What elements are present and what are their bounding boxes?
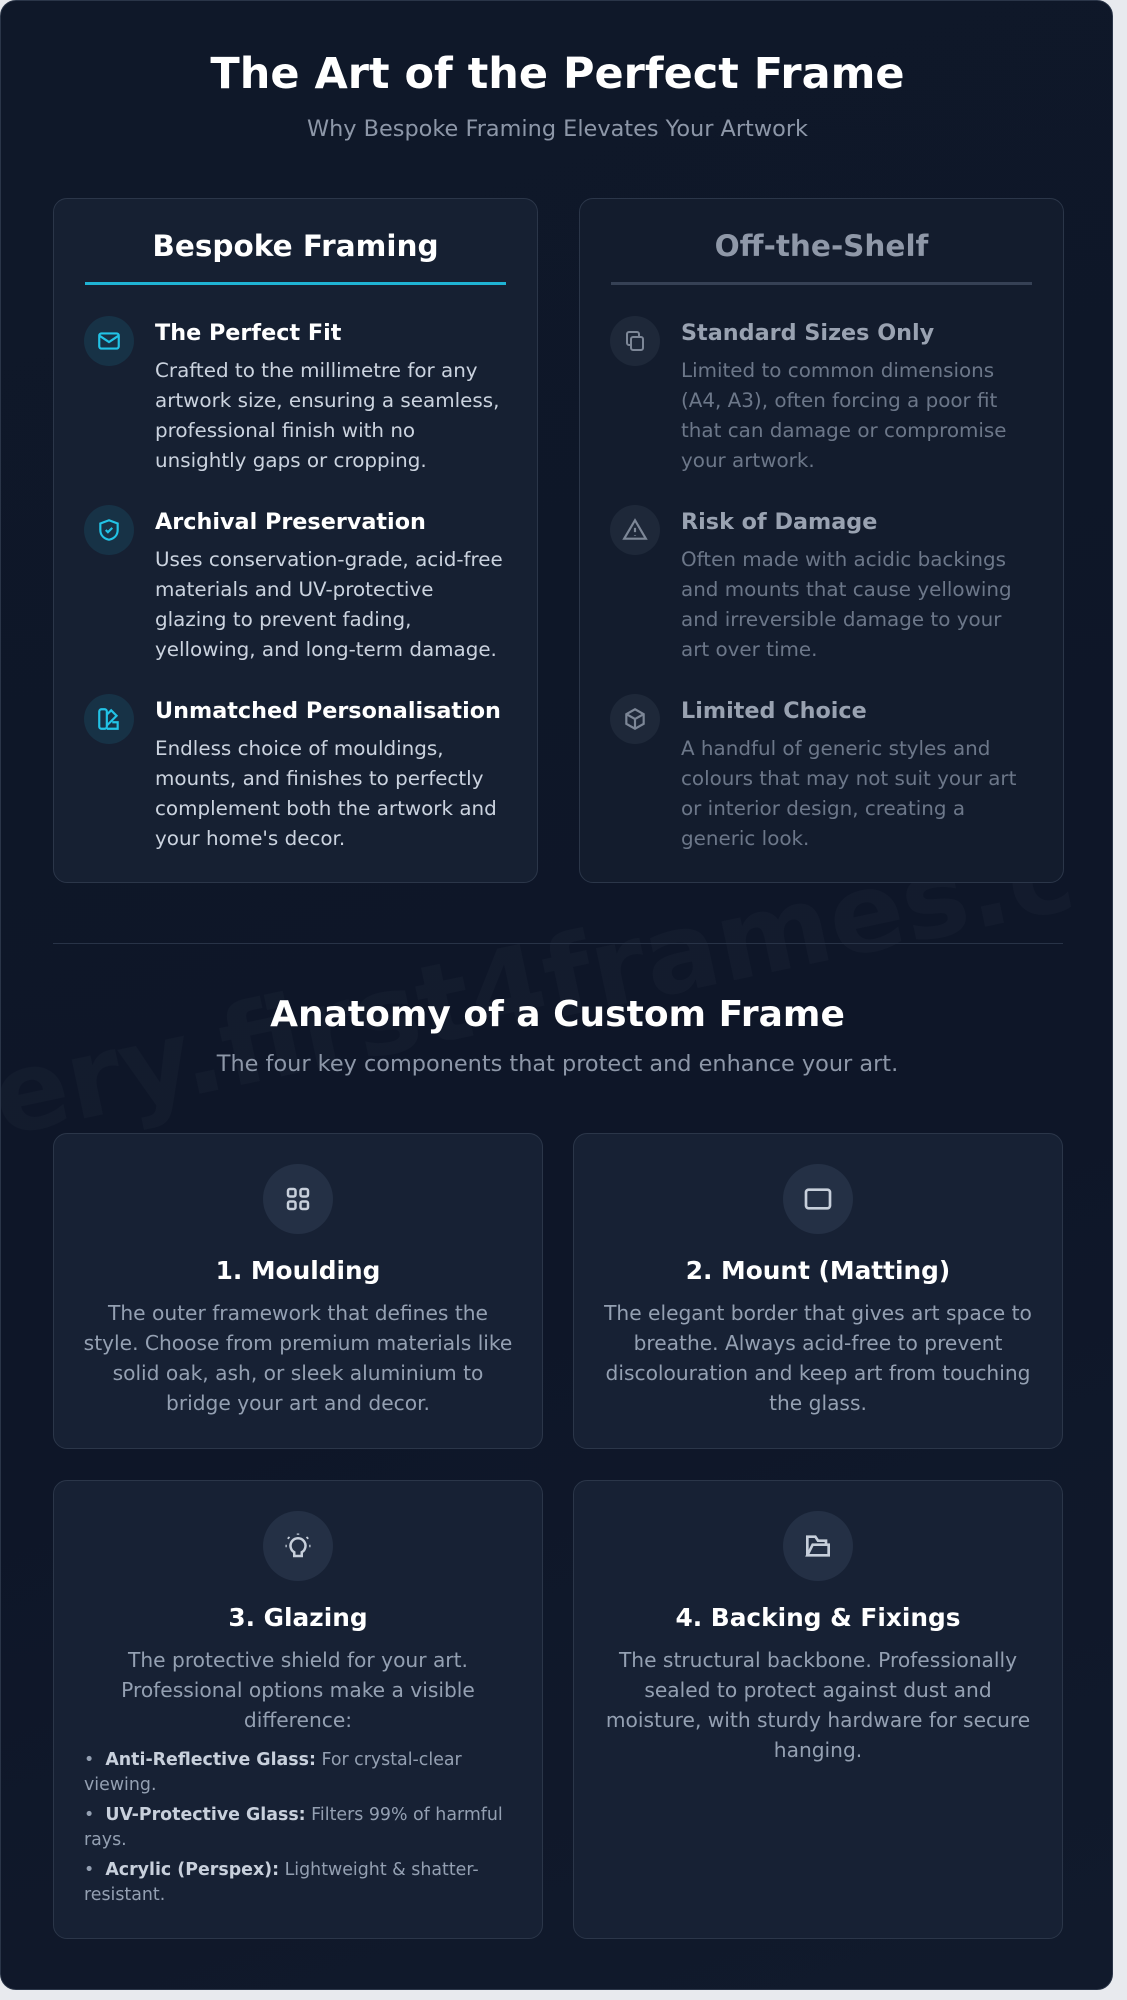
card: backing: The structural backbone. Professionally sealed to protect against dust and moisture, with sturdy hardware for secure hanging. xyxy=(606,1648,1030,1762)
item: limited choice xyxy=(610,694,1016,850)
card: backing: 4. Backing & Fixings xyxy=(675,1603,961,1632)
heading: off-the-shelf: Off-the-Shelf xyxy=(715,229,928,263)
icon: box xyxy=(610,694,660,744)
icon: warning xyxy=(610,505,660,555)
item: perfect fit xyxy=(84,316,499,472)
watermark: ery.first4frames.c xyxy=(0,807,1084,1161)
icon: copy xyxy=(610,316,660,366)
icon: folder xyxy=(783,1511,853,1581)
icon: grid xyxy=(263,1164,333,1234)
panel: bespoke framing: Endless choice of mouldings, mounts, and finishes to perfectly complement both the artwork and your home's decor. xyxy=(155,737,497,850)
card: mount: 2. Mount (Matting) xyxy=(686,1256,950,1285)
card: glazing: The protective shield for your art. Professional options make a visible difference: xyxy=(121,1648,475,1732)
card: glazing xyxy=(53,1480,543,1939)
panel: off-the-shelf: Limited to common dimensions (A4, A3), often forcing a poor fit that can damage or compromise your artwork. xyxy=(681,359,1007,472)
subtitle: Why Bespoke Framing Elevates Your Artwork xyxy=(307,116,808,142)
section subtitle: The four key components that protect and enhance your art. xyxy=(217,1051,898,1077)
card: mount xyxy=(573,1133,1063,1449)
panel: off-the-shelf xyxy=(579,198,1064,883)
icon: envelope xyxy=(84,316,134,366)
item: archival preservation xyxy=(84,505,503,661)
card: moulding: 1. Moulding xyxy=(216,1256,380,1285)
item: standard sizes xyxy=(610,316,1007,472)
section title: anatomy: Anatomy of a Custom Frame xyxy=(270,994,845,1035)
panel: off-the-shelf: Often made with acidic backings and mounts that cause yellowing and irreversible damage to your art over time. xyxy=(681,548,1012,661)
card: mount: The elegant border that gives art space to breathe. Always acid-free to prevent discolouration and keep art from touching the glass. xyxy=(604,1301,1032,1415)
panel: off-the-shelf: Standard Sizes Only xyxy=(681,320,934,346)
panel: off-the-shelf: Limited Choice xyxy=(681,698,867,724)
card: glazing: 3. Glazing xyxy=(228,1603,368,1632)
bullet list: • UV-Protective Glass: Filters 99% of harmful rays. xyxy=(84,1805,503,1850)
item: risk of damage xyxy=(610,505,1012,661)
icon: shield xyxy=(84,505,134,555)
panel: bespoke framing xyxy=(53,198,538,883)
bullet list: • Acrylic (Perspex): Lightweight & shatter-resistant. xyxy=(84,1860,479,1905)
panel: bespoke framing: Unmatched Personalisation xyxy=(155,698,501,724)
panel: bespoke framing: Uses conservation-grade, acid-free materials and UV-protective glazing to prevent fading, yellowing, and long-term damage. xyxy=(155,548,503,661)
icon: bulb xyxy=(263,1511,333,1581)
panel: off-the-shelf: Risk of Damage xyxy=(681,509,877,535)
icon: rectangle xyxy=(783,1164,853,1234)
panel: bespoke framing: Archival Preservation xyxy=(155,509,426,535)
panel: off-the-shelf: A handful of generic styles and colours that may not suit your art or interior design, creating a generic look. xyxy=(681,737,1016,850)
panel: bespoke framing: The Perfect Fit xyxy=(155,320,341,346)
bullet list: • Anti-Reflective Glass: For crystal-clear viewing. xyxy=(84,1750,462,1795)
card: moulding: The outer framework that defines the style. Choose from premium materials like solid oak, ash, or sleek aluminium to bridge your art and decor. xyxy=(84,1301,512,1415)
title: The Art of the Perfect Frame xyxy=(210,49,905,99)
card: backing xyxy=(573,1480,1063,1939)
icon: swatch xyxy=(84,694,134,744)
item: personalisation xyxy=(84,694,501,850)
bullet list xyxy=(84,1750,503,1905)
heading: bespoke: Bespoke Framing xyxy=(152,229,439,263)
card: moulding xyxy=(53,1133,543,1449)
panel: bespoke framing: Crafted to the millimetre for any artwork size, ensuring a seamless, professional finish with no unsightly gaps or cropping. xyxy=(155,359,499,472)
